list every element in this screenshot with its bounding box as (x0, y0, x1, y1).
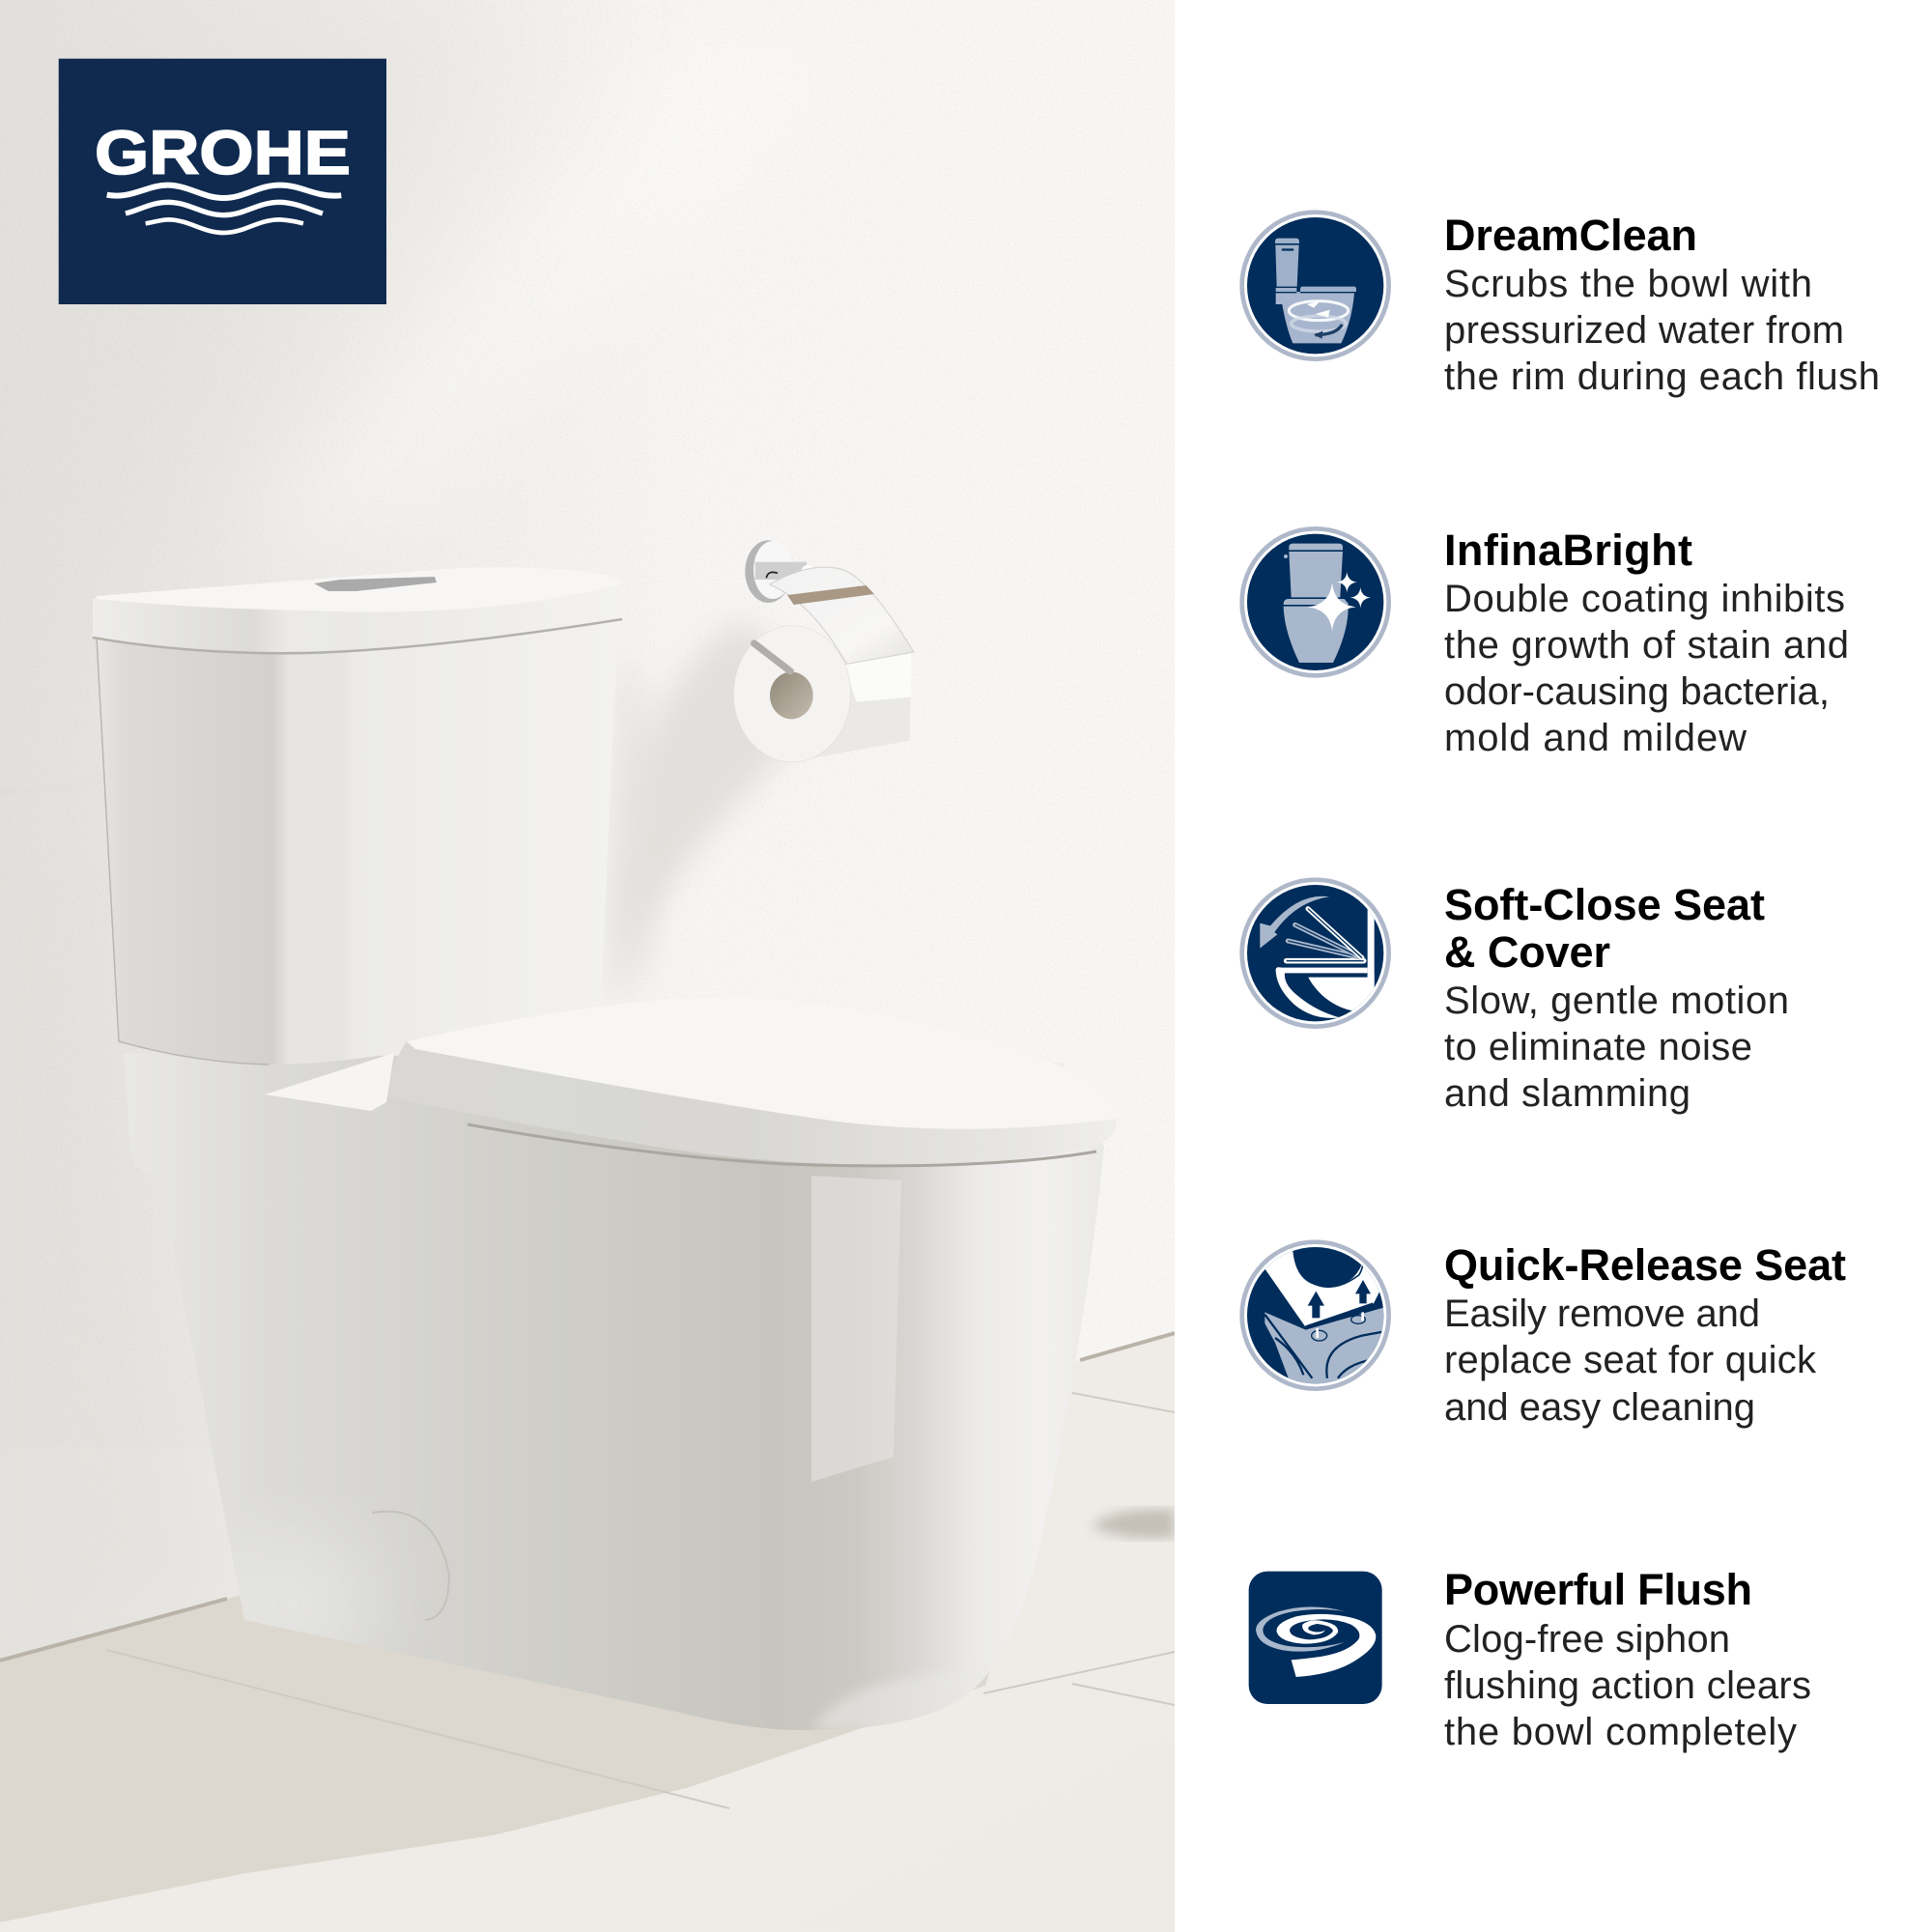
wall background (0, 0, 1175, 1659)
description: and easy cleaning (1444, 1386, 1755, 1429)
description (1444, 1618, 1811, 1753)
tank body (97, 623, 618, 1065)
seat (388, 996, 1117, 1166)
logo waves (107, 185, 341, 233)
tank lid (93, 567, 622, 653)
logo wordmark: GROHE (95, 118, 351, 187)
bowl light patches (253, 1559, 352, 1638)
bowl (124, 1053, 1104, 1739)
heading: DreamClean (1444, 211, 1697, 260)
icon: seat lifting off (1242, 1239, 1389, 1394)
arrow (1260, 896, 1329, 949)
description: replace seat for quick (1444, 1339, 1817, 1381)
wall mount (745, 540, 814, 603)
description: to eliminate noise (1444, 1026, 1752, 1068)
floor (0, 1333, 1175, 1932)
paper roll (733, 626, 911, 762)
heading: InfinaBright (1444, 526, 1692, 575)
feature: Soft-Close Seat & Cover (1242, 880, 1789, 1115)
sparkles (1307, 572, 1371, 631)
description: mold and mildew (1444, 717, 1747, 759)
feature: Quick-Release Seat (1242, 1239, 1846, 1429)
description: Scrubs the bowl with (1444, 263, 1812, 305)
panel: product photo (0, 0, 1175, 1932)
heading: Soft-Close Seat (1444, 880, 1765, 929)
toilet (93, 567, 1117, 1739)
description (1444, 980, 1789, 1115)
description: pressurized water from (1444, 309, 1844, 352)
flush button (314, 577, 437, 591)
logo: GROHE (59, 59, 386, 304)
cleanout cap (372, 1512, 449, 1620)
heading: & Cover (1444, 927, 1610, 977)
icon: closing seat (1242, 880, 1389, 1027)
description: the growth of stain and (1444, 624, 1849, 667)
description: flushing action clears (1444, 1664, 1811, 1707)
wall shadow of tank and holder (607, 620, 782, 983)
heading: Quick-Release Seat (1444, 1240, 1846, 1290)
icon: toilet with swirling water (1242, 213, 1389, 359)
description (1444, 263, 1880, 398)
description: Slow, gentle motion (1444, 980, 1789, 1022)
feature: Powerful Flush (1249, 1565, 1811, 1753)
icon: toilet with sparkles (1242, 528, 1389, 675)
bowl reflection (811, 1176, 901, 1482)
feature: InfinaBright (1242, 526, 1849, 759)
heading: Powerful Flush (1444, 1565, 1752, 1614)
heading (1444, 880, 1765, 977)
description (1444, 1293, 1817, 1429)
description: the rim during each flush (1444, 355, 1880, 398)
description: Clog-free siphon (1444, 1618, 1730, 1661)
neck under tank (265, 1053, 394, 1111)
toilet paper holder (733, 540, 914, 762)
lift arrows (1308, 1280, 1371, 1318)
description (1444, 578, 1849, 759)
cover (770, 567, 914, 664)
description: Double coating inhibits (1444, 578, 1845, 620)
description: Easily remove and (1444, 1293, 1760, 1335)
feature: DreamClean (1242, 211, 1880, 398)
icon: spiral flush (1249, 1572, 1382, 1704)
description: odor-causing bacteria, (1444, 670, 1830, 713)
pin (754, 643, 790, 671)
description: and slamming (1444, 1072, 1690, 1115)
description: the bowl completely (1444, 1711, 1797, 1753)
